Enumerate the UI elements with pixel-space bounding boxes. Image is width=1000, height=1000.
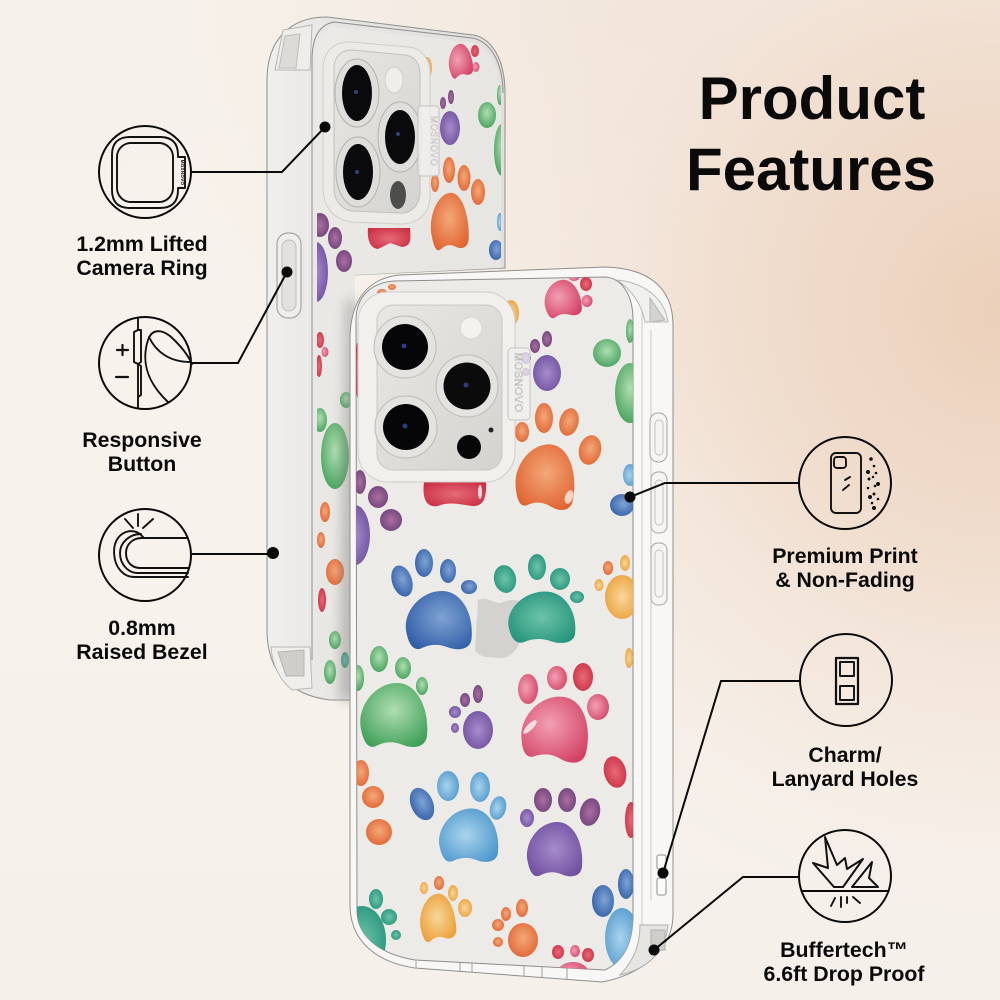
paw: red right <box>604 756 633 838</box>
leader line: drop proof <box>648 877 798 956</box>
label: premium print: Premium Print <box>772 544 918 568</box>
label: responsive button: Responsive <box>82 428 202 452</box>
title: Features <box>686 136 936 203</box>
brand tab front: MOSNOVO <box>512 352 524 413</box>
paw: red under camera <box>424 482 486 506</box>
side button rear <box>277 233 301 318</box>
case body rear <box>267 17 505 700</box>
paw: yellow rear <box>426 57 432 76</box>
brand tab rear <box>418 106 439 176</box>
title <box>686 65 936 203</box>
paw: green lower left <box>352 646 428 747</box>
feature: camera ring <box>76 122 330 280</box>
corner bumper bottom front <box>620 925 668 975</box>
paw: yellow bottom <box>417 876 472 944</box>
leader line: responsive button <box>192 266 292 363</box>
camera module rear <box>323 42 439 224</box>
sensor front <box>457 435 481 459</box>
paw: purple left rear <box>317 213 352 302</box>
paw: pink large <box>518 663 609 764</box>
paw prints rear <box>317 44 501 684</box>
paw: blue bottom right <box>592 869 633 964</box>
label: lanyard holes: Charm/ <box>808 743 882 767</box>
phone case: front view <box>338 267 673 986</box>
shadow of front case <box>340 300 356 700</box>
back panel front <box>356 277 633 970</box>
sensor rear <box>390 181 406 209</box>
label: lanyard holes: Lanyard Holes <box>772 767 918 791</box>
label: raised bezel: Raised Bezel <box>76 640 208 664</box>
feature: raised bezel <box>76 509 279 664</box>
lens front 1 <box>374 316 436 378</box>
paw: blue rear <box>489 213 501 260</box>
label: camera ring: 1.2mm Lifted <box>76 232 208 256</box>
paw: purple rear <box>440 90 460 145</box>
icon: responsive button <box>99 317 192 409</box>
lanyard holes <box>657 855 666 895</box>
icon: lanyard holes <box>800 634 892 726</box>
paw: small purple center <box>449 685 493 749</box>
paw: blue small right <box>610 464 633 516</box>
label: drop proof: 6.6ft Drop Proof <box>764 962 925 986</box>
corner bumper top rear <box>275 25 312 70</box>
mic front <box>488 428 494 432</box>
paw: pink bottom <box>552 945 594 970</box>
paw: yellow right <box>594 555 633 668</box>
label: raised bezel: 0.8mm <box>108 616 176 640</box>
feature: lanyard holes <box>658 634 918 878</box>
title: Product <box>699 65 925 132</box>
label: responsive button: Button <box>108 452 176 476</box>
corner bumper top front <box>617 280 668 322</box>
flash front <box>460 317 482 339</box>
lens front 3 <box>375 396 437 458</box>
leader line: lanyard holes <box>658 681 800 878</box>
paw: pink rear <box>448 44 480 79</box>
brand tab front <box>508 348 530 420</box>
paw: purple top <box>521 331 561 391</box>
paw: teal center <box>491 554 584 643</box>
icon: premium print <box>799 437 891 529</box>
lens rear 2 <box>378 102 422 172</box>
icon: camera ring <box>99 126 191 218</box>
side frame highlight <box>642 310 651 925</box>
corner bumper bottom rear <box>271 647 312 690</box>
flash rear <box>385 67 403 93</box>
case body front <box>350 267 673 982</box>
paw: blue center <box>388 549 477 649</box>
label: camera ring: Camera Ring <box>76 256 208 280</box>
phone case: rear view <box>267 17 510 700</box>
feature: responsive button <box>82 266 292 476</box>
paw: green right <box>593 319 633 423</box>
brand tab rear: MOSNOVO <box>429 116 439 166</box>
paw: green rear <box>478 85 501 176</box>
top frame line rear <box>312 22 503 660</box>
paw: orange bottom <box>492 899 538 957</box>
paw: purple large <box>520 788 603 876</box>
feature: premium print <box>624 437 918 592</box>
lens front 2 <box>436 355 498 417</box>
paws: lower left rear <box>317 332 350 684</box>
bottom grip segments <box>416 961 567 980</box>
paw: orange left column <box>353 760 392 845</box>
icon: raised bezel <box>99 509 191 601</box>
paws: small top left <box>355 284 396 398</box>
icon: camera ring: MOSNOVO <box>180 160 185 185</box>
paw: yellow behind camera <box>508 300 519 324</box>
paw: teal bottom left <box>357 889 401 950</box>
lens rear 1 <box>335 59 379 127</box>
apple logo <box>475 599 522 658</box>
camera module front <box>358 292 530 482</box>
lens rear 3 <box>336 137 380 207</box>
paw prints front <box>356 277 633 970</box>
label: premium print: & Non-Fading <box>775 568 915 592</box>
paw: pink top <box>544 277 592 318</box>
paw: orange rear <box>429 157 485 251</box>
paw: purple left <box>356 470 402 565</box>
leader line: camera ring <box>192 122 330 172</box>
feature: drop proof <box>648 830 925 986</box>
paw: sky blue <box>405 771 509 862</box>
leader line: premium print <box>624 483 799 502</box>
volume buttons front <box>650 413 667 605</box>
paw: orange large <box>513 403 604 511</box>
leader line: raised bezel <box>192 547 279 559</box>
label: drop proof: Buffertech™ <box>780 938 908 962</box>
back panel rear <box>317 27 501 695</box>
paw: red rear <box>368 228 410 249</box>
icon: drop proof <box>799 830 891 922</box>
